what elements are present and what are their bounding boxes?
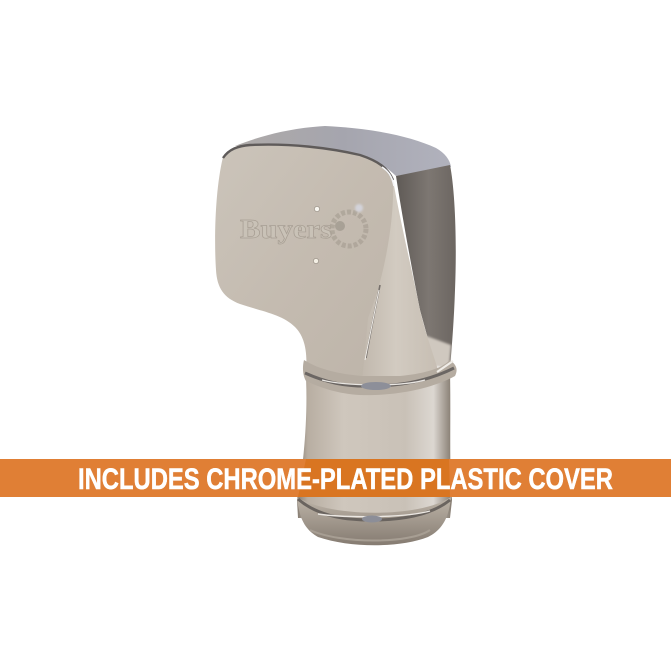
top face — [235, 126, 451, 176]
top edge highlight — [223, 145, 393, 180]
ridge highlight — [366, 285, 380, 358]
collar ring — [303, 360, 457, 395]
lower cylinder — [297, 372, 452, 518]
banner overlap with product — [298, 459, 450, 497]
bottom flange — [297, 497, 451, 545]
right side face — [396, 165, 456, 368]
front ridge panel — [360, 180, 440, 382]
embossed logo — [240, 204, 366, 246]
front face — [215, 145, 393, 382]
embossed logo: Buyers — [240, 214, 332, 244]
product: chrome-plated cover — [215, 126, 457, 545]
mounting holes — [313, 206, 320, 264]
orange banner — [0, 459, 671, 497]
